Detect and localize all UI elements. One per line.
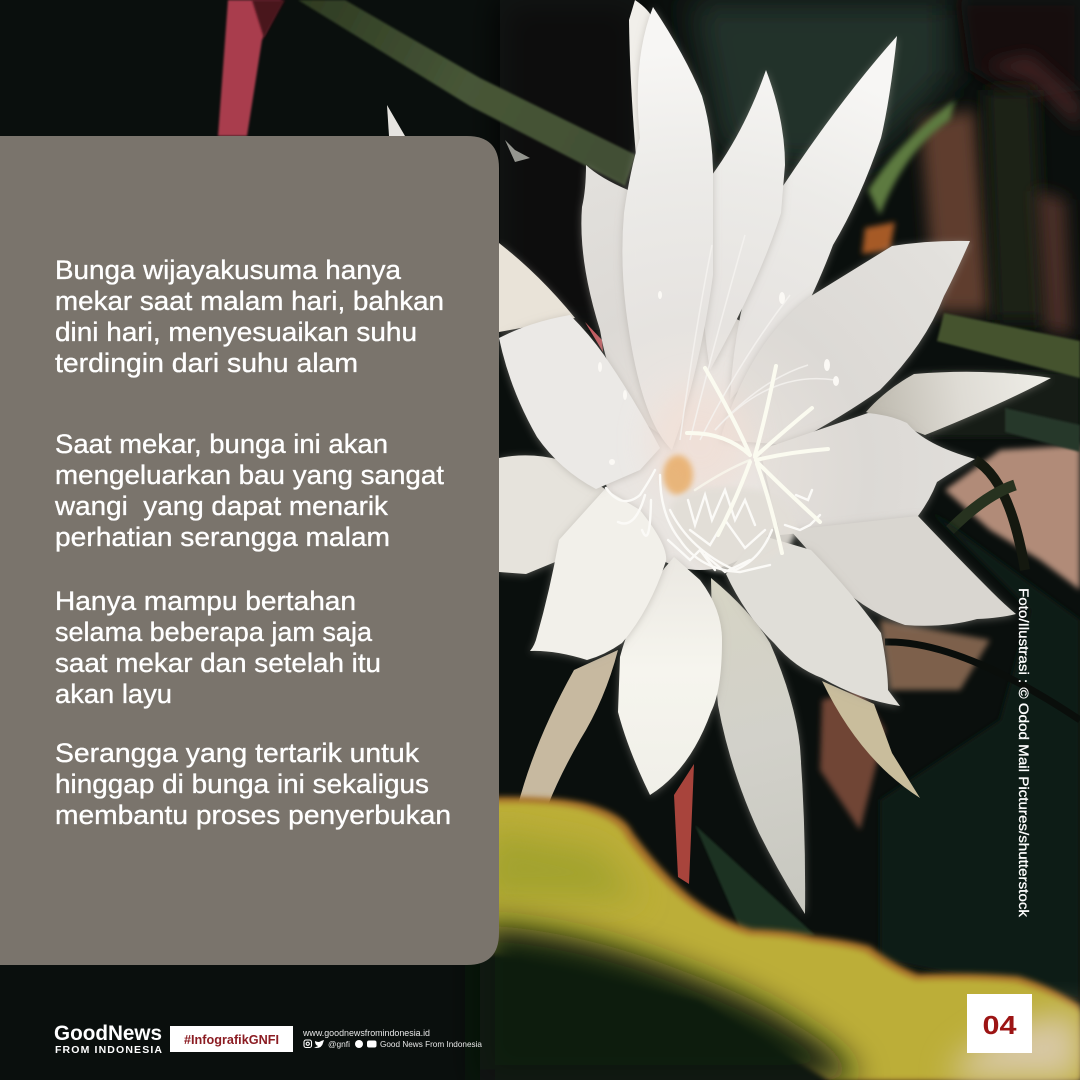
second stem right [1005,408,1080,452]
petal lower [726,535,900,706]
petal right large [720,241,970,445]
text panel [0,136,499,965]
white flower [499,0,1051,914]
leaf dark green shadow [480,925,860,1080]
pink brown patches below petals [880,620,990,690]
paragraph 3 [55,586,381,709]
anther dots [598,291,839,465]
petal thin right [866,372,1051,435]
brown trunk right [1036,190,1072,335]
petal thin lower [711,578,805,914]
paragraph 1: dini hari, menyesuaikan suhu [55,317,417,347]
foggy foliage top [690,0,950,170]
brown trunk left [920,110,990,312]
paragraph 1: mekar saat malam hari, bahkan [55,286,444,316]
paragraph 4: hinggap di bunga ini sekaligus [55,769,429,799]
dark leaf below flower [695,825,815,940]
leaf left greener area [480,830,640,900]
red stem top left [218,0,282,136]
sepal lower right [822,681,920,798]
page number: 04 [982,1010,1017,1040]
orange bud [862,222,895,254]
petal lower left [530,489,666,660]
paragraph 2 [54,429,445,552]
lower stamen bundle [670,487,796,572]
icon: facebook [355,1040,363,1048]
dark area below right stem [930,372,1080,437]
petal upper left narrow [581,165,668,440]
sepal lower left [518,650,618,805]
petal upper left [499,315,660,489]
stem top [298,0,636,186]
leaf stroke one [975,460,1025,570]
petal bottom [618,557,722,795]
dark red top right [960,0,1080,100]
paragraph 2: Saat mekar, bunga ini akan [55,429,388,459]
leaf tan highlight bottom right [950,1015,1080,1080]
footer logo GoodNews [54,1022,162,1056]
paragraph 4 [55,738,451,830]
footer logo GoodNews: FROM INDONESIA [55,1044,162,1056]
leaf stroke two [950,485,1015,530]
hashtag badge: #InfografikGNFI [184,1033,279,1047]
droplet on stem [505,140,530,162]
petal top middle [703,70,785,370]
petal lower left far [499,455,605,574]
red stem below flower [674,764,694,884]
stamen filaments upper [680,235,835,440]
green shoot [868,100,955,215]
petal top back [629,0,660,200]
website and social handles: www.goodnewsfromindonesia.id [302,1028,430,1038]
red bud behind petal [585,322,603,352]
paragraph 1: Bunga wijayakusuma hanya [55,255,402,285]
stem right [937,313,1080,378]
petal top centre [622,7,713,450]
paragraph 3: saat mekar dan setelah itu [55,648,381,678]
hashtag badge [170,1026,293,1052]
icon: youtube [367,1040,376,1048]
dark curved stem [885,642,1080,720]
pistil star [687,366,828,553]
paragraph 3: akan layu [55,679,172,709]
paragraph 1: terdingin dari suhu alam [55,348,358,378]
paragraph 4: membantu proses penyerbukan [55,800,451,830]
paragraph 2: perhatian serangga malam [55,522,390,552]
pink wall right [945,445,1080,590]
website and social handles: Good News From Indonesia [380,1039,482,1049]
paragraph 2: wangi yang dapat menarik [54,491,389,521]
paragraph 4: Serangga yang tertarik untuk [55,738,420,768]
paragraph 2: mengeluarkan bau yang sangat [55,460,445,490]
dark green leaf lower right [880,510,1080,1000]
website and social handles [302,1028,482,1049]
paragraph 1 [55,255,444,378]
orange throat [663,455,693,495]
dark teal left of flower [500,0,640,330]
petal right tall [730,36,897,400]
icon: twitter [314,1040,324,1048]
base disc filling centre [600,310,800,570]
photo credit: Foto/Ilustrasi : © Odod Mail Pictures/shutterstock [1016,588,1031,917]
small back petal [387,105,405,136]
petal back left [499,243,575,332]
dark red shadow on stem [252,0,285,38]
paragraph 3: selama beberapa jam saja [55,617,373,647]
paragraph 3: Hanya mampu bertahan [55,586,356,616]
dark leaves across pink wall [950,460,1025,570]
icon: instagram [304,1040,312,1048]
leaf orange rim [480,797,1080,1080]
dark green trunk band [985,90,1045,320]
leaf yellow body [480,803,1080,1080]
footer logo GoodNews: GoodNews [54,1022,162,1045]
petal right middle [760,413,975,535]
website and social handles: @gnfi [328,1039,350,1049]
stamens lower cluster [606,470,820,572]
page number [967,994,1032,1053]
blurred foreground leaf [480,797,1080,1080]
central blush [650,385,750,495]
petal lower right [790,516,1016,626]
